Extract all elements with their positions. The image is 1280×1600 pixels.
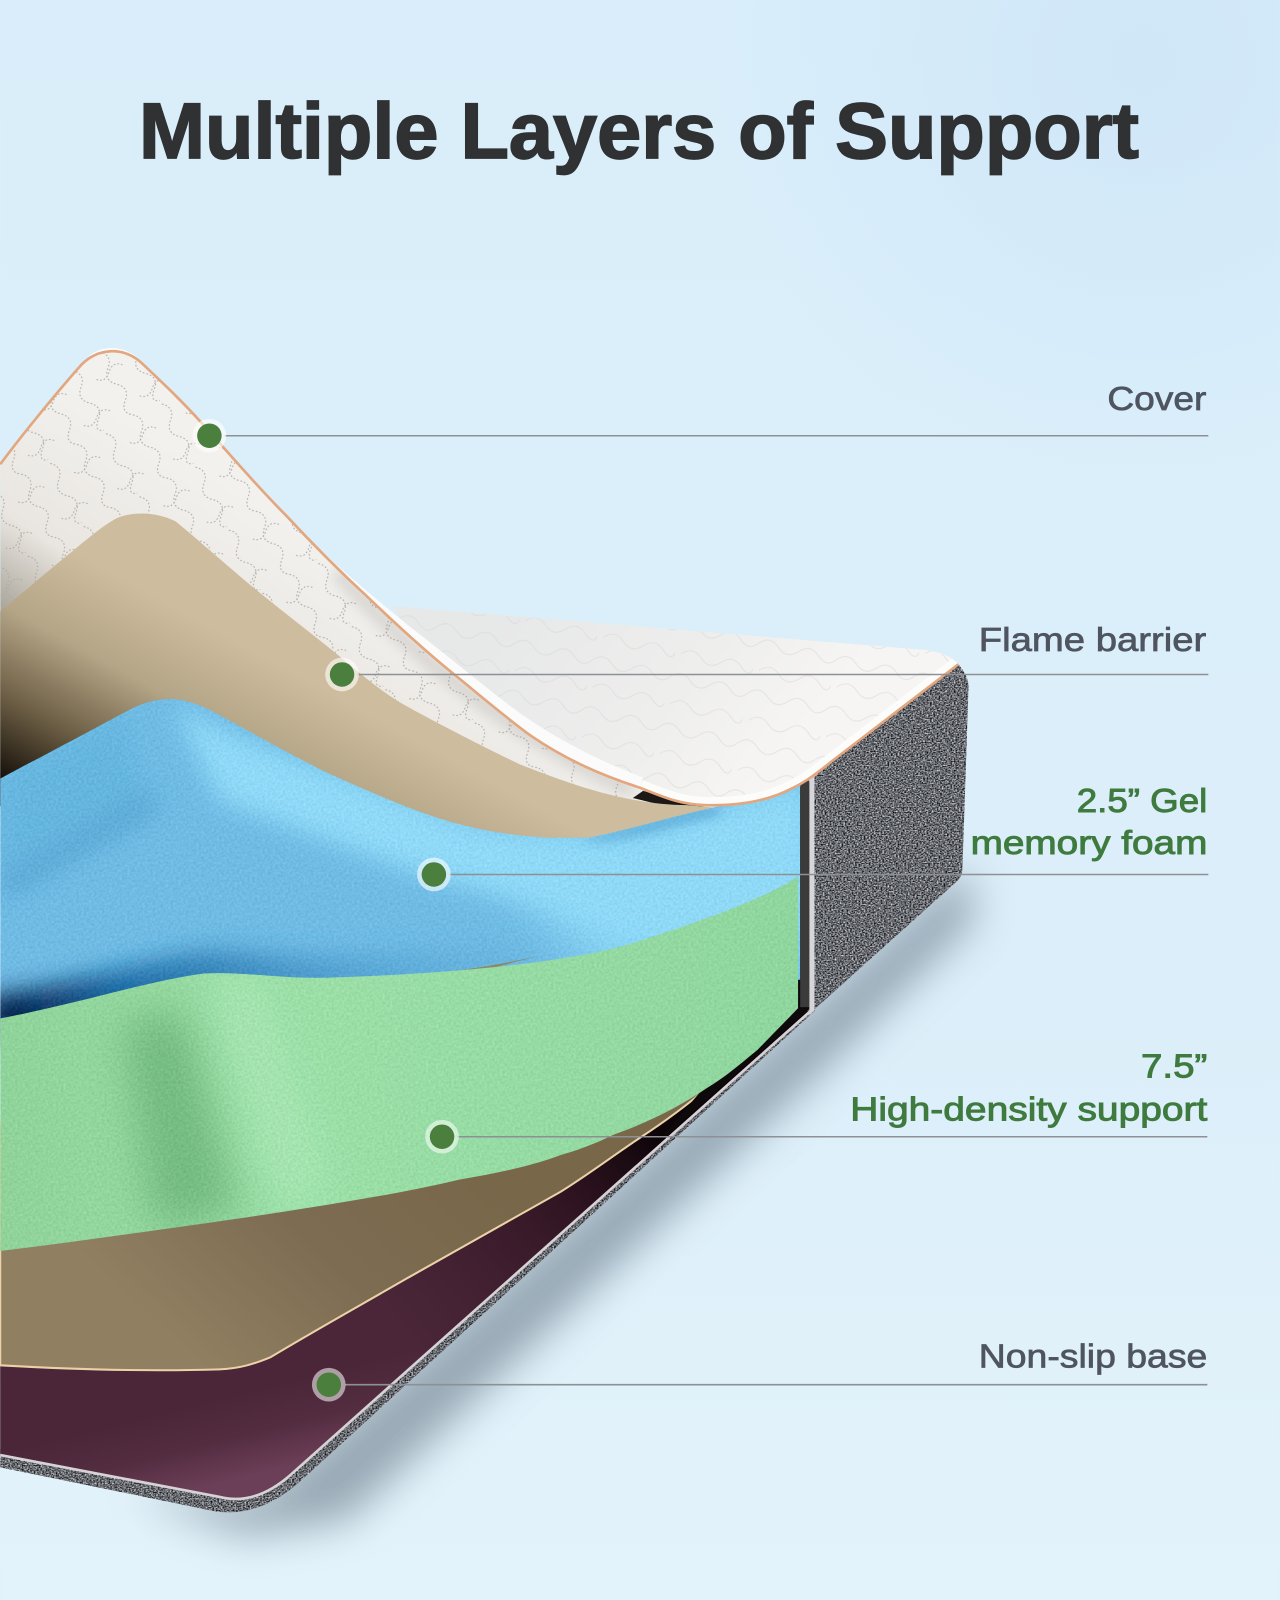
callout: flame barrier [325, 622, 1208, 691]
callout: flame barrier: Flame barrier [979, 622, 1206, 659]
layer: base felt edge [0, 1005, 816, 1512]
cast shadow [133, 867, 975, 1536]
callout: non-slip base [312, 1338, 1207, 1402]
side panel edge strips [800, 777, 814, 1015]
callout: gel memory foam: memory foam [971, 825, 1207, 862]
callout: cover: Cover [1107, 381, 1206, 418]
callout: gel memory foam [417, 783, 1208, 891]
layer: cover underside [0, 352, 650, 802]
title: Multiple Layers of Support [139, 87, 1139, 175]
callout: high-density support: High-density support [850, 1091, 1208, 1128]
layer: cover top sheet [0, 348, 970, 816]
black inner gap [653, 783, 809, 1147]
layer: lower flame barrier [0, 1020, 735, 1370]
callout: gel memory foam: 2.5” Gel [1077, 783, 1207, 820]
gap shadow between cover and barrier [633, 791, 704, 808]
callout: cover [193, 381, 1208, 453]
layer: upper flame barrier [0, 514, 720, 842]
layer: high-density support foam [0, 867, 817, 1265]
layer: non-slip base [0, 778, 811, 1499]
layer: gel memory foam [0, 694, 817, 1061]
callout: high-density support [425, 1049, 1208, 1154]
side panel: grey felt [813, 664, 969, 1010]
sliver between foam and support [352, 955, 541, 980]
callout: high-density support: 7.5” [1141, 1049, 1207, 1086]
callout: non-slip base: Non-slip base [979, 1338, 1207, 1375]
mattress cutaway illustration [0, 337, 975, 1536]
